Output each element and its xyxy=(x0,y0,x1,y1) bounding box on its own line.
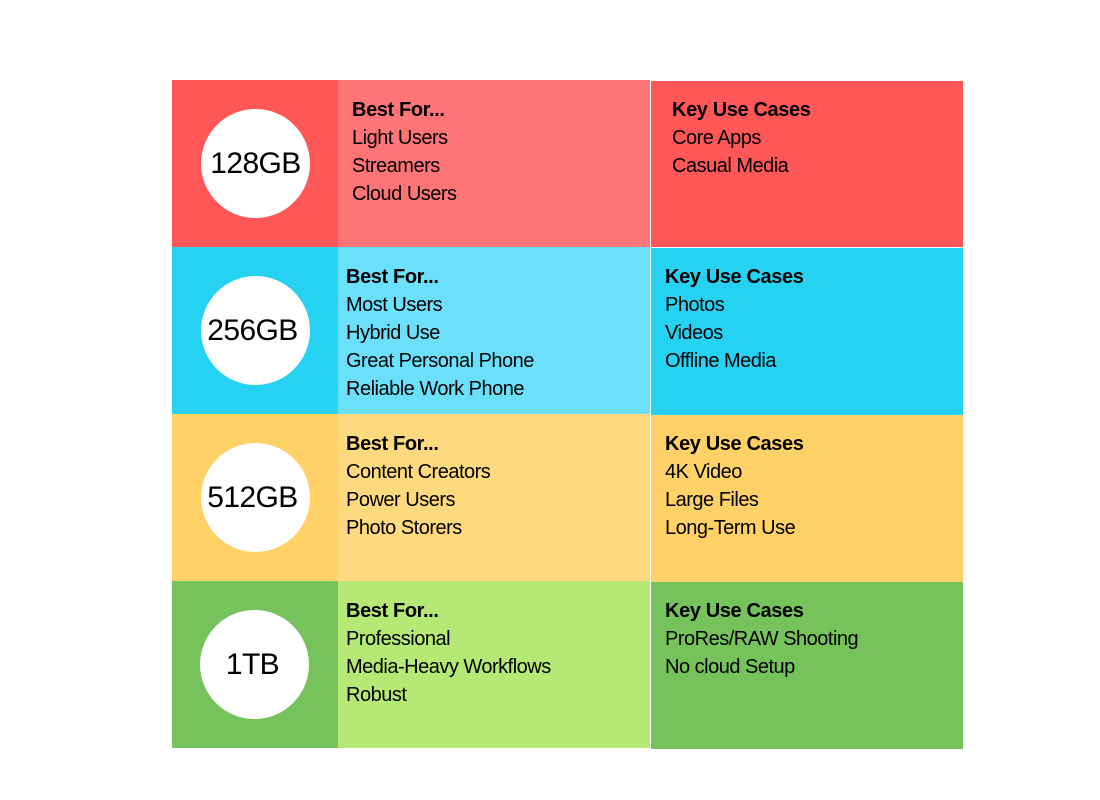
storage table xyxy=(172,80,963,749)
icon: 128GB circle xyxy=(201,109,310,218)
panel: 256GB best for xyxy=(338,247,650,414)
text: 512GB use cases list: Key Use Cases xyxy=(665,433,804,455)
text: 1TB best for list: Professional xyxy=(346,628,450,650)
text: 128GB best for list: Cloud Users xyxy=(352,183,457,205)
text: 256GB use cases list: Offline Media xyxy=(665,350,776,372)
text: 512GB use cases list: 4K Video xyxy=(665,461,742,483)
panel: 1TB size cell xyxy=(172,581,338,748)
text: 512GB best for list: Best For... xyxy=(346,433,439,455)
text: 512GB use cases list: Large Files xyxy=(665,489,758,511)
panel: 128GB size cell xyxy=(172,80,338,247)
panel: 1TB key use cases xyxy=(651,582,963,749)
panel: 256GB size cell xyxy=(172,247,338,414)
text: 1TB use cases list: No cloud Setup xyxy=(665,656,795,678)
icon: 512GB circle: 512GB xyxy=(207,481,298,514)
text: 512GB use cases list xyxy=(665,433,804,539)
panel: 256GB key use cases xyxy=(651,248,963,415)
text: 1TB best for list xyxy=(346,600,551,706)
panel: 512GB key use cases xyxy=(651,415,963,582)
text: 256GB use cases list: Key Use Cases xyxy=(665,266,804,288)
text: 512GB best for list: Content Creators xyxy=(346,461,490,483)
text: 128GB best for list: Light Users xyxy=(352,127,448,149)
text: 128GB best for list: Streamers xyxy=(352,155,440,177)
text: 512GB best for list: Power Users xyxy=(346,489,455,511)
icon: 128GB circle: 128GB xyxy=(210,147,301,180)
text: 256GB best for list: Hybrid Use xyxy=(346,322,440,344)
text: 1TB best for list: Best For... xyxy=(346,600,439,622)
text: 128GB use cases list: Key Use Cases xyxy=(672,99,810,121)
text: 256GB best for list: Best For... xyxy=(346,266,439,288)
text: 128GB best for list xyxy=(352,99,457,205)
text: 512GB best for list: Photo Storers xyxy=(346,517,462,539)
text: 256GB use cases list xyxy=(665,266,804,372)
text: 256GB best for list: Reliable Work Phone xyxy=(346,378,524,400)
panel: 1TB best for xyxy=(338,581,650,748)
text: 256GB use cases list: Videos xyxy=(665,322,723,344)
text: 128GB use cases list: Core Apps xyxy=(672,127,761,149)
icon: 256GB circle: 256GB xyxy=(207,314,298,347)
text: 1TB best for list: Robust xyxy=(346,684,406,706)
text: 256GB best for list xyxy=(346,266,534,400)
icon: 256GB circle xyxy=(201,276,310,385)
panel: 128GB key use cases xyxy=(651,81,963,247)
text: 512GB best for list xyxy=(346,433,490,539)
text: 128GB best for list: Best For... xyxy=(352,99,445,121)
text: 1TB use cases list xyxy=(665,600,858,678)
text: 256GB use cases list: Photos xyxy=(665,294,724,316)
panel: 128GB best for xyxy=(338,80,650,247)
icon: 1TB circle xyxy=(200,610,309,719)
panel: 512GB size cell xyxy=(172,414,338,581)
panel: 512GB best for xyxy=(338,414,650,581)
text: 256GB best for list: Great Personal Phone xyxy=(346,350,534,372)
icon: 1TB circle: 1TB xyxy=(226,648,279,681)
text: 1TB best for list: Media-Heavy Workflows xyxy=(346,656,551,678)
text: 128GB use cases list xyxy=(672,99,810,177)
text: 1TB use cases list: Key Use Cases xyxy=(665,600,804,622)
icon: 512GB circle xyxy=(201,443,310,552)
text: 1TB use cases list: ProRes/RAW Shooting xyxy=(665,628,858,650)
text: 256GB best for list: Most Users xyxy=(346,294,442,316)
text: 512GB use cases list: Long-Term Use xyxy=(665,517,795,539)
text: 128GB use cases list: Casual Media xyxy=(672,155,788,177)
